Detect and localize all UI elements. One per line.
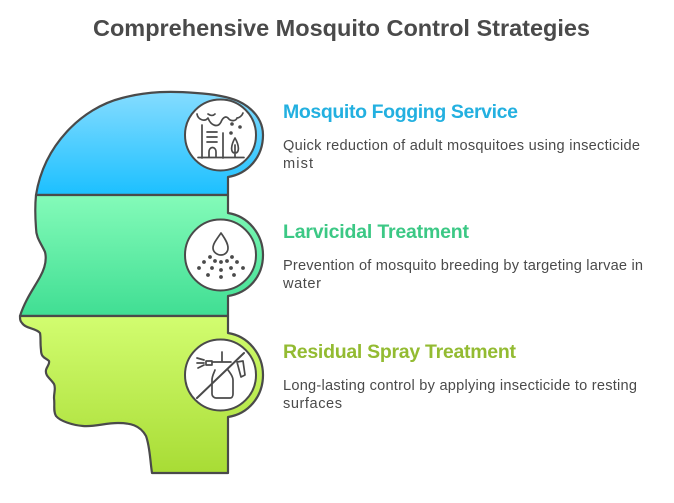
text block: Larvicidal Treatment: Larvicidal Treatment (283, 221, 470, 243)
text block: Residual Spray Treatment (283, 341, 637, 412)
text block: Residual Spray Treatment: Residual Spray Treatment (283, 341, 516, 363)
text block: Larvicidal Treatment: Prevention of mosquito breeding by targeting larvae in (283, 258, 643, 274)
icon: fogging building (185, 100, 256, 170)
text block: Larvicidal Treatment: water (282, 276, 321, 292)
text block: Larvicidal Treatment (282, 221, 643, 292)
text block: Mosquito Fogging Service: Quick reduction of adult mosquitoes using insecticide (283, 138, 640, 154)
panel: green head segment (20, 195, 263, 316)
text block: Mosquito Fogging Service: mist (283, 156, 313, 172)
icon: crossed-out spray bottle (185, 340, 256, 410)
panel: blue head segment (36, 92, 263, 195)
text block: Mosquito Fogging Service: Mosquito Fogging Service (283, 101, 518, 123)
text block: Residual Spray Treatment: Long-lasting control by applying insecticide to resting (283, 378, 637, 394)
icon: water drop and larvae (185, 220, 256, 290)
head diagram (20, 92, 263, 473)
text block: Mosquito Fogging Service (283, 101, 640, 172)
panel: lime head segment (20, 316, 263, 473)
title: Comprehensive Mosquito Control Strategies (93, 15, 590, 41)
text block: Residual Spray Treatment: surfaces (283, 396, 342, 412)
